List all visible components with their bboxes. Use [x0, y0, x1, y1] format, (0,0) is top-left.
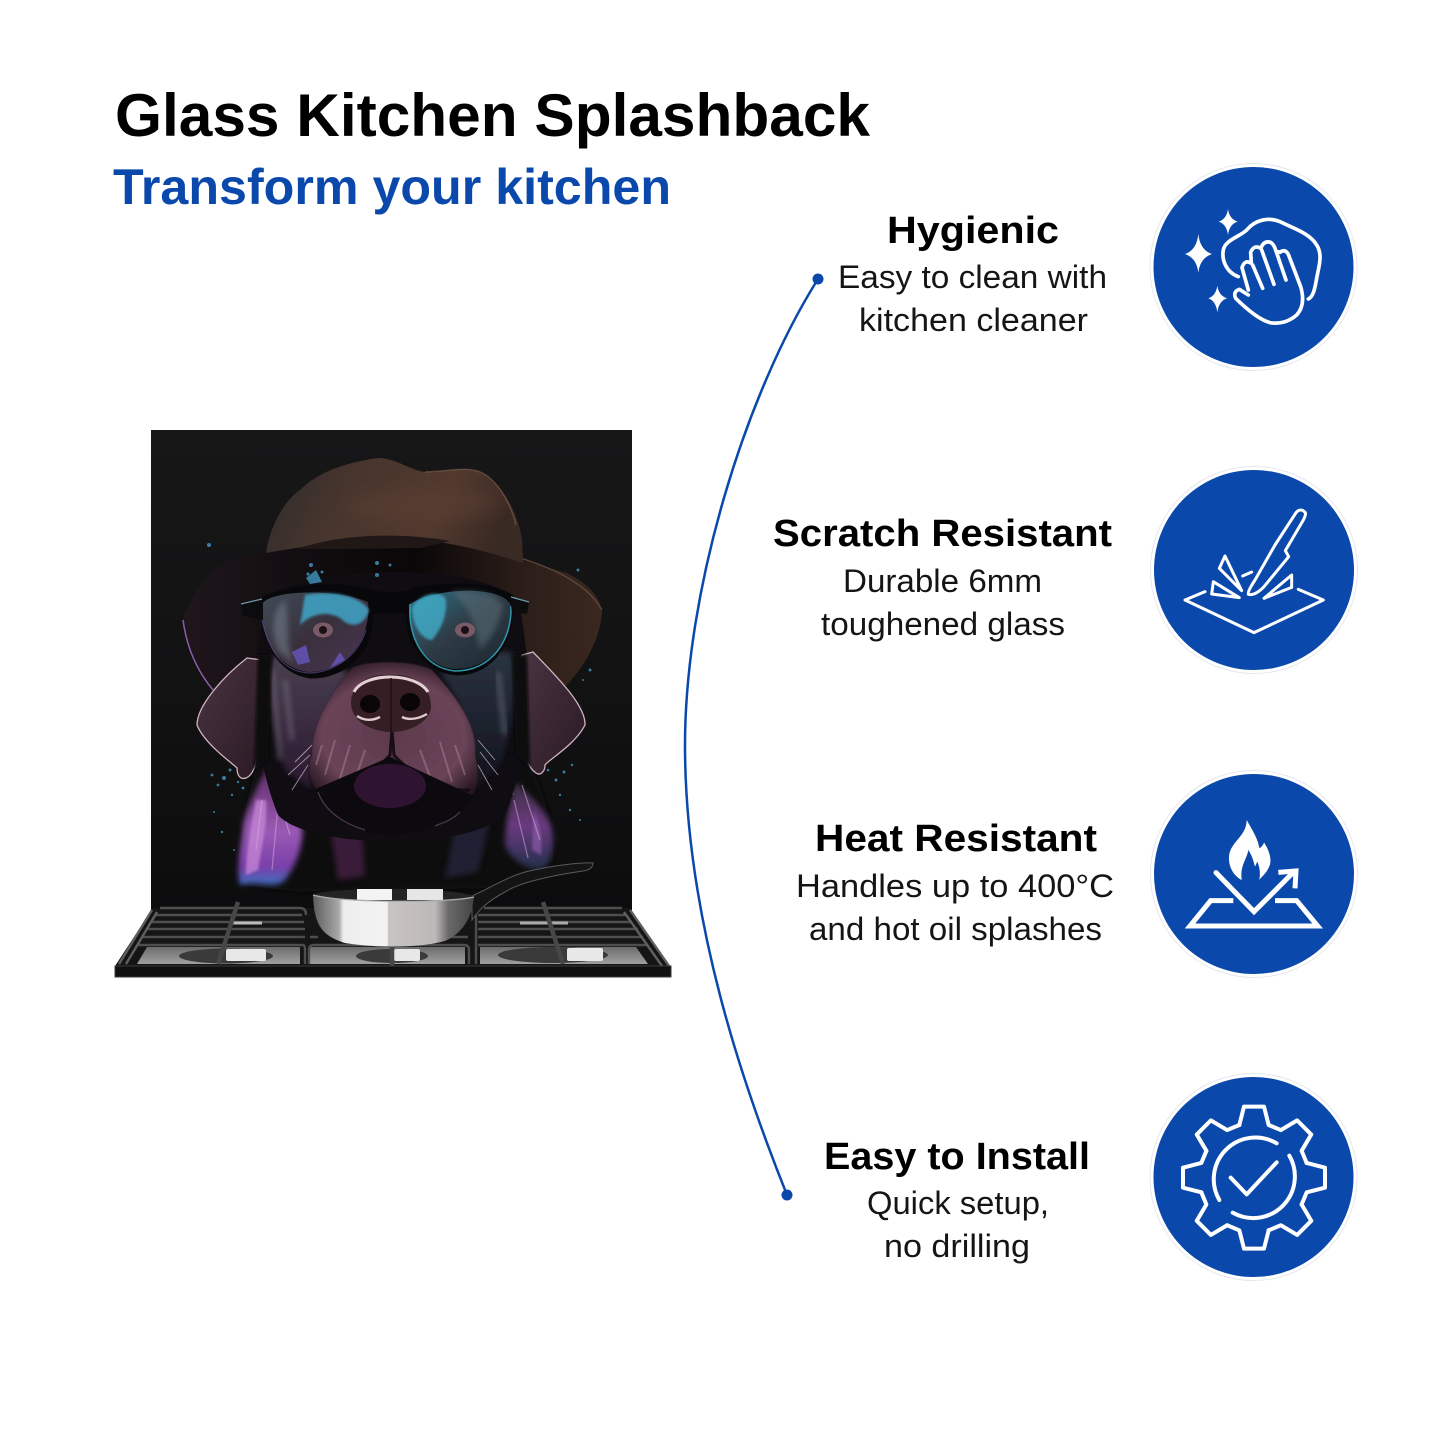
right face fur — [440, 652, 516, 790]
feature text: scratch resistant: Scratch Resistant — [773, 513, 1112, 555]
splashback panel with dog artwork — [151, 430, 632, 920]
icon: knife scratching glass — [1150, 466, 1358, 674]
feature text: hygienic: Easy to clean with — [838, 259, 1107, 295]
curve end dot — [782, 1190, 792, 1200]
frying pan — [313, 863, 593, 947]
hat crown — [266, 458, 523, 563]
feature text: easy to install: no drilling — [884, 1228, 1030, 1264]
dog ears — [197, 652, 585, 778]
burner trays — [137, 947, 648, 964]
dog head — [256, 572, 528, 841]
feature text: hygienic — [838, 210, 1107, 338]
feature text: heat resistant: Heat Resistant — [815, 818, 1097, 860]
feature text: scratch resistant: Durable 6mm — [843, 563, 1042, 599]
grates — [119, 908, 669, 966]
dog nose — [351, 675, 431, 732]
subtitle: Transform your kitchen — [113, 159, 671, 215]
feature text: heat resistant: Handles up to 400°C — [796, 868, 1114, 904]
icon: flame over surface with arrow — [1150, 770, 1358, 978]
sunglasses — [241, 585, 529, 677]
dog muzzle — [309, 662, 478, 797]
burners — [179, 923, 608, 964]
feature text: scratch resistant — [773, 513, 1112, 642]
feature text: easy to install: Quick setup, — [867, 1185, 1049, 1221]
title: Glass Kitchen Splashback — [115, 82, 871, 149]
feature text: easy to install: Easy to Install — [824, 1136, 1090, 1178]
feature text: scratch resistant: toughened glass — [821, 606, 1065, 642]
dog body and chest fur — [234, 768, 556, 890]
left face fur — [270, 653, 350, 790]
curve start dot — [812, 274, 824, 284]
whiskers — [288, 740, 498, 790]
feature text: hygienic: Hygienic — [887, 210, 1059, 252]
product image: splashback with dog artwork above hob — [115, 430, 671, 977]
dog lower jaw — [316, 757, 472, 798]
gas hob — [115, 863, 671, 977]
eyes — [313, 622, 333, 638]
paint splashes — [207, 543, 592, 851]
icon: hand wiping with sparkles — [1150, 164, 1357, 370]
icon: gear with check mark — [1150, 1074, 1357, 1280]
feature text: easy to install — [824, 1136, 1090, 1264]
grate crossbars — [218, 902, 563, 966]
feature text: heat resistant — [796, 818, 1114, 947]
feature text: hygienic: kitchen cleaner — [859, 302, 1088, 338]
hob front edge — [115, 966, 671, 977]
hat brim — [183, 539, 602, 690]
connector curve — [685, 274, 824, 1200]
feature text: heat resistant: and hot oil splashes — [809, 911, 1102, 947]
